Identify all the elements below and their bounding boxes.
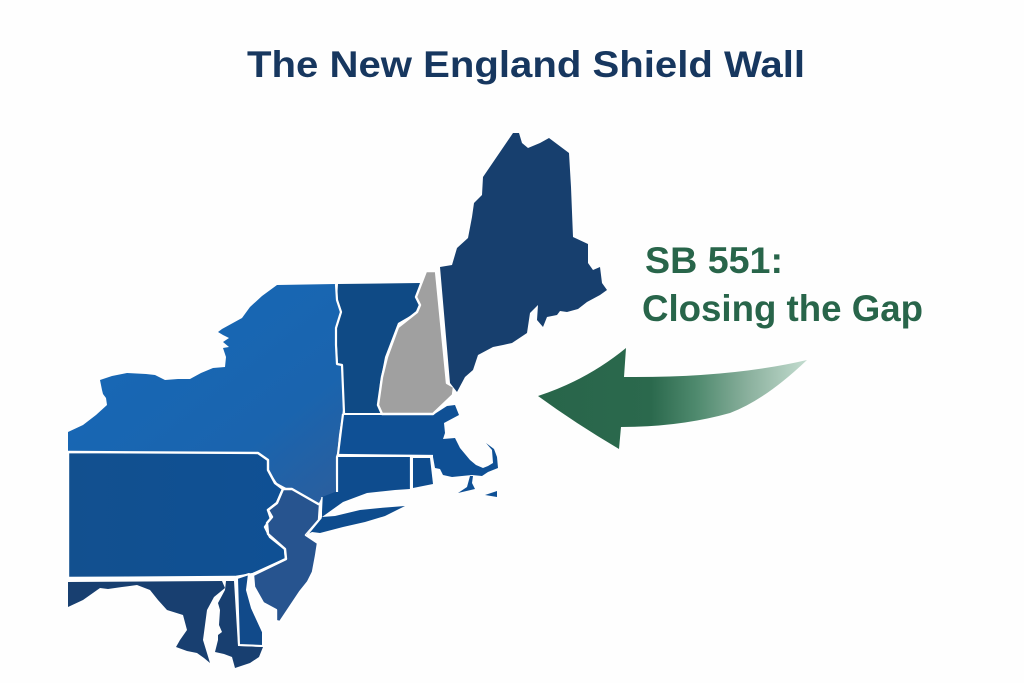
state: Connecticut (322, 457, 410, 517)
label line 2: Closing the Gap (642, 288, 923, 329)
state: Delaware (237, 574, 263, 646)
state: Vermont (336, 283, 420, 413)
Maryland western and southern shore (68, 581, 225, 663)
state: Rhode Island (413, 458, 433, 488)
Long Island (306, 506, 405, 535)
Nantucket (485, 491, 497, 497)
state border lines (307, 284, 433, 535)
callout label: SB 551 (642, 240, 923, 329)
Maryland eastern shore (215, 581, 263, 668)
state: New York (68, 284, 343, 503)
state: Maryland (68, 581, 263, 668)
title: The New England Shield Wall (247, 44, 805, 85)
map: northeastern states (68, 133, 607, 668)
arrow pointing at New Hampshire gap (538, 348, 807, 449)
Martha's Vineyard and Nantucket (458, 476, 497, 497)
state: Massachusetts (338, 405, 498, 477)
state: Pennsylvania (68, 452, 286, 578)
state: Maine (440, 133, 607, 392)
state: New Hampshire (gray gap) (378, 271, 454, 414)
label line 1: SB 551: (645, 240, 783, 281)
Martha's Vineyard (458, 476, 475, 493)
state: New Jersey (253, 489, 320, 622)
